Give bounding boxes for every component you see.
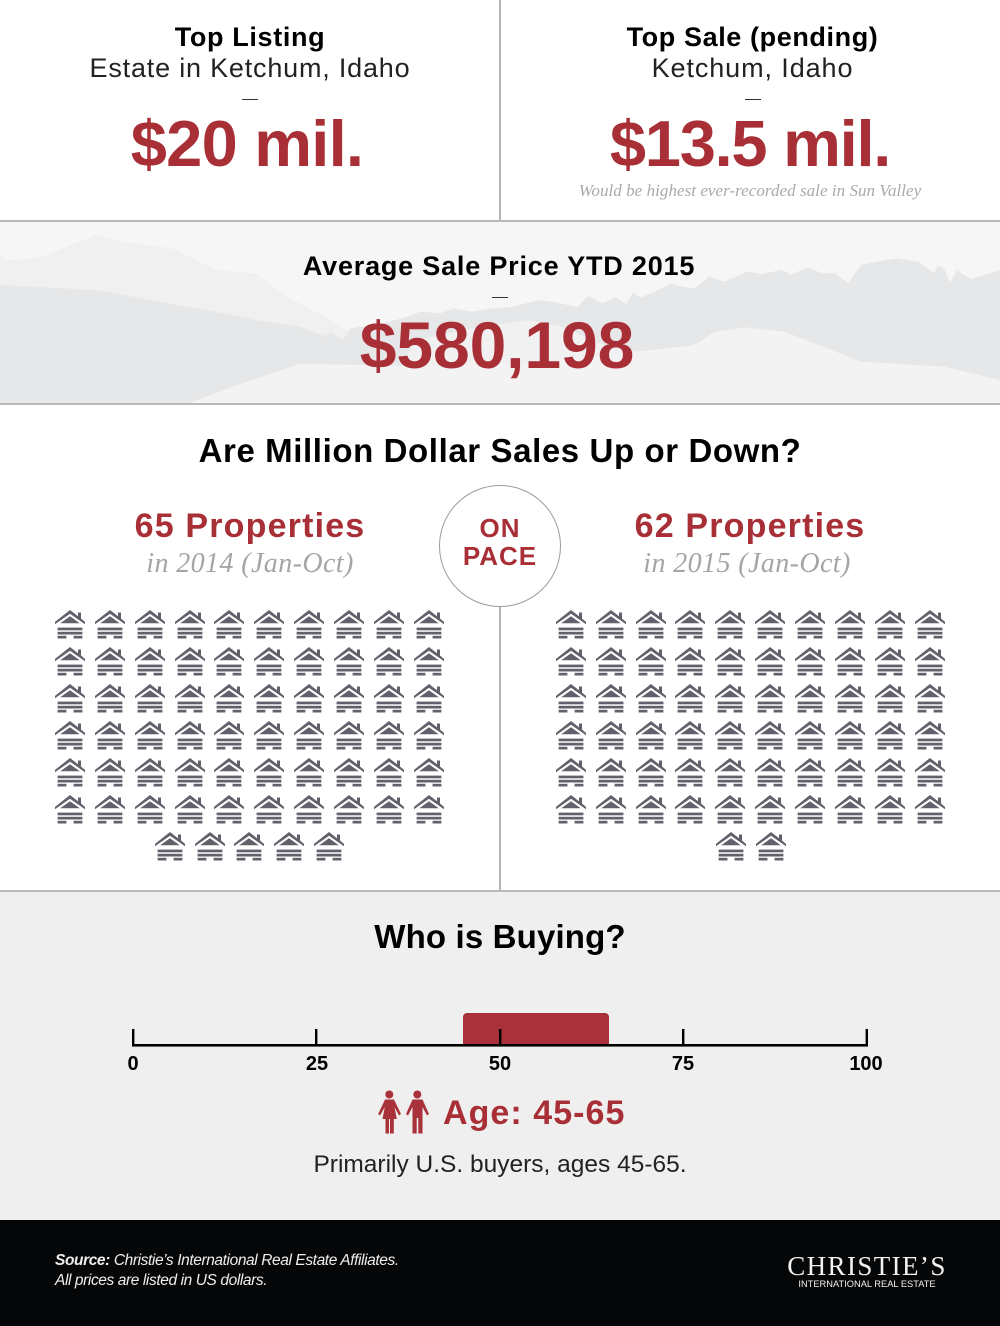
chart: age range axis: 75: [672, 1053, 694, 1075]
panel: top listing: [90, 22, 410, 180]
text: source note: Source: Christie’s International Real Estate Affiliates.: [55, 1252, 399, 1269]
chart: age range axis: 50: [489, 1053, 511, 1075]
panel: top sale: [579, 22, 922, 200]
text: source note: All prices are listed in US dollars.: [55, 1272, 267, 1289]
badge: on pace: [439, 485, 561, 607]
text: 2015 period: in 2015 (Jan-Oct): [643, 548, 851, 579]
heading: who is buying: Who is Buying?: [374, 918, 626, 955]
heading: age range: Age: 45-65: [443, 1094, 625, 1132]
text: buyer description: Primarily U.S. buyers, ages 45-65.: [313, 1151, 687, 1178]
heading: top sale: Top Sale (pending): [627, 22, 878, 52]
chart: age range axis: 100: [849, 1053, 883, 1075]
footer: [0, 1220, 1000, 1326]
chart: age range axis: 0: [127, 1053, 139, 1075]
chart: 2014 house pictogram: [55, 610, 444, 860]
note: highest sale: Would be highest ever-recorded sale in Sun Valley: [579, 181, 921, 200]
logo: Christie's: CHRISTIE’S: [787, 1251, 947, 1281]
value: 13.5 million: $13.5 mil.: [610, 107, 890, 180]
text: 2014 period: in 2014 (Jan-Oct): [146, 548, 354, 579]
text: source note: [54, 1252, 399, 1289]
bar: age range 45-65: [463, 1013, 609, 1045]
panel: average sale price: [0, 222, 1000, 405]
badge: on pace: PACE: [463, 541, 537, 571]
mountain backdrop: [0, 258, 1000, 403]
badge: on pace: ON: [480, 513, 520, 543]
panel: million dollar sales: [135, 432, 865, 890]
panel: who is buying: [0, 892, 1000, 1220]
value: 580,198: $580,198: [360, 308, 634, 382]
heading: million dollar sales: Are Million Dollar Sales Up or Down?: [199, 432, 801, 469]
heading: 65 properties: 65 Properties: [135, 507, 365, 545]
dash: [242, 99, 258, 100]
heading: 62 properties: 62 Properties: [635, 507, 865, 545]
chart: age range axis: [127, 1013, 883, 1075]
text: sale location: Ketchum, Idaho: [652, 53, 853, 83]
chart: 2015 house pictogram: [556, 610, 945, 860]
value: 20 million: $20 mil.: [131, 107, 363, 180]
dash: [492, 297, 508, 298]
text: listing location: Estate in Ketchum, Idaho: [90, 53, 410, 83]
icon: woman and man: [378, 1090, 429, 1134]
heading: average sale price: Average Sale Price YTD 2015: [303, 251, 695, 281]
logo: Christie's: INTERNATIONAL REAL ESTATE: [798, 1279, 936, 1289]
dash: [745, 99, 761, 100]
chart: age range axis: 25: [306, 1053, 328, 1075]
heading: top listing: Top Listing: [175, 22, 325, 52]
